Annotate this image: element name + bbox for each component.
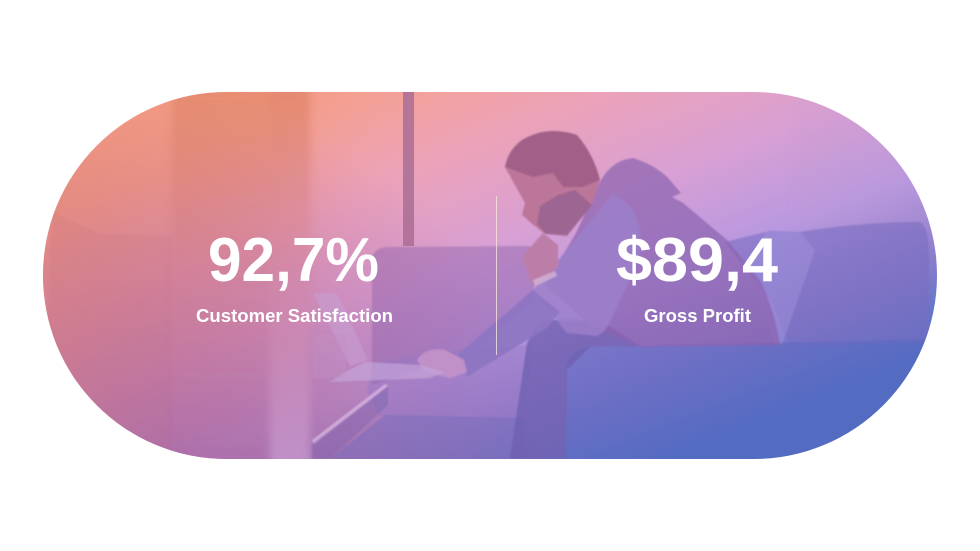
photo: right couch cushions	[725, 222, 929, 346]
photo: jeans	[510, 320, 640, 459]
infographic canvas	[43, 92, 937, 459]
photo: room background	[171, 92, 312, 459]
photo: beard	[537, 190, 592, 236]
photo: couch and man	[312, 130, 930, 459]
photo: left couch back	[43, 212, 172, 459]
stat value: 92,7%: 92,7%	[208, 226, 379, 295]
photo: right couch arm	[566, 339, 940, 459]
divider line	[496, 196, 497, 355]
photo: hand on laptop	[417, 349, 467, 378]
photo: laptop base and table	[330, 362, 445, 382]
photo: hoodie arm	[533, 195, 641, 336]
panel: gradient pill with photo	[43, 85, 940, 465]
photo: window frame	[403, 92, 414, 246]
photo: hoodie body	[545, 158, 780, 347]
photo: forearm to laptop	[458, 290, 560, 377]
stat value: $89,4: $89,4	[616, 226, 779, 295]
photo: watch	[533, 271, 557, 286]
photo: floor shadow	[330, 415, 525, 459]
photo: hair	[505, 131, 600, 187]
stat right: Gross Profit	[616, 226, 779, 326]
stat left: Customer Satisfaction	[196, 226, 393, 326]
photo: couch back	[372, 246, 535, 385]
photo: face	[505, 160, 600, 234]
photo: laptop screen	[313, 293, 368, 366]
photo: couch seat	[367, 345, 530, 420]
photo: mug	[313, 334, 346, 378]
photo: table leg	[312, 384, 388, 444]
stat label: Gross Profit: Gross Profit	[644, 306, 751, 326]
stat label: Customer Satisfaction: Customer Satisfaction	[196, 306, 393, 326]
photo: hand on chin	[522, 233, 558, 287]
